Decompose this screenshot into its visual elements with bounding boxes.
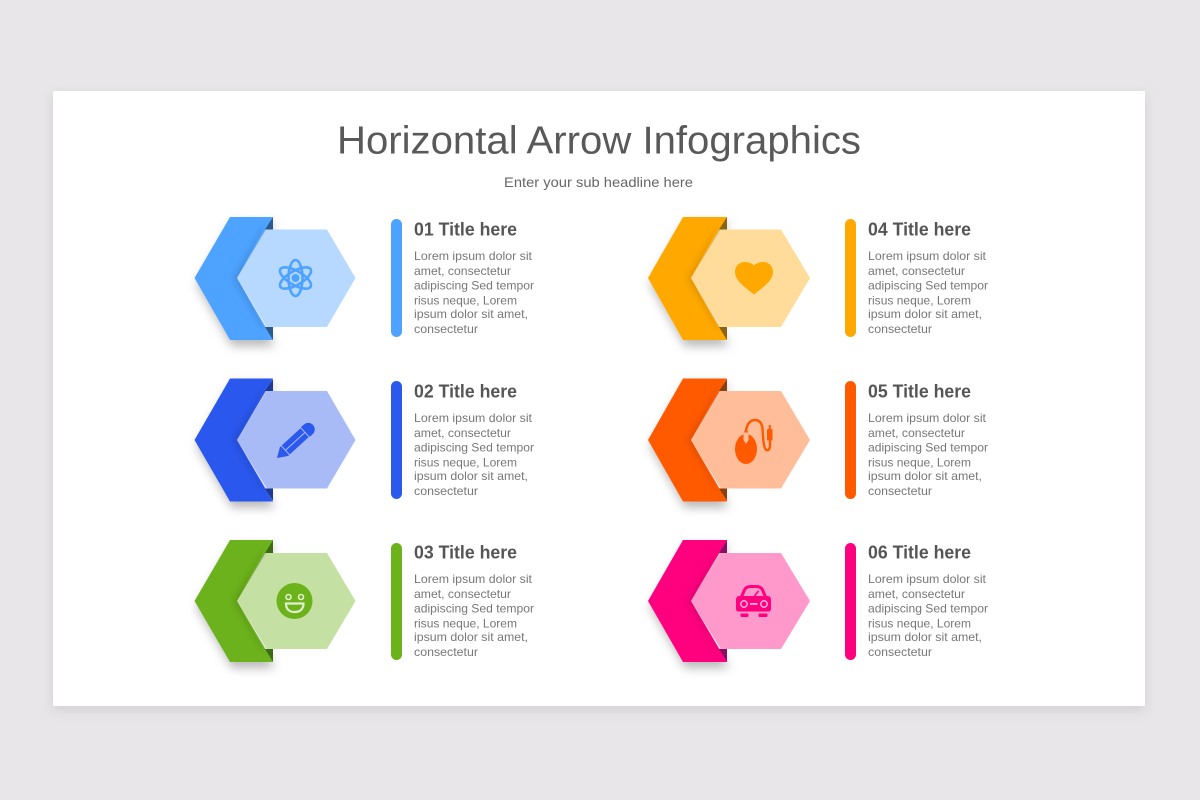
body text 05: consectetur — [868, 484, 932, 498]
item 05 — [648, 378, 988, 502]
heading 01: 01 Title here — [414, 220, 517, 240]
arrow 05 — [646, 378, 731, 513]
item 02 — [194, 378, 534, 502]
hexagon 04 — [691, 230, 810, 327]
body text 02: risus neque, Lorem — [414, 456, 517, 470]
body text 01: risus neque, Lorem — [414, 294, 517, 308]
accent bar 04 — [845, 219, 856, 337]
body text 02: Lorem ipsum dolor sit — [414, 411, 533, 425]
heading 05: 05 Title here — [868, 382, 971, 402]
accent bar 02 — [391, 381, 402, 499]
item 03 — [194, 540, 534, 662]
heading 02: 02 Title here — [414, 382, 517, 402]
body text 04: ipsum dolor sit amet, — [868, 307, 982, 321]
body text 03 — [414, 572, 534, 659]
body text 05: ipsum dolor sit amet, — [868, 469, 982, 483]
body text 06: adipiscing Sed tempor — [868, 602, 988, 616]
body text 04: risus neque, Lorem — [868, 294, 971, 308]
arrow 02 — [192, 378, 277, 513]
icon: pencil — [273, 420, 317, 463]
body text 06: amet, consectetur — [868, 587, 965, 601]
accent bar 01 — [391, 219, 402, 337]
body text 04: consectetur — [868, 322, 932, 336]
heading 03: 03 Title here — [414, 542, 517, 562]
body text 03: adipiscing Sed tempor — [414, 602, 534, 616]
body text 01 — [414, 249, 534, 336]
body text 06: risus neque, Lorem — [868, 616, 971, 630]
body text 05 — [868, 411, 988, 498]
icon: atom — [277, 260, 314, 296]
heading 06: 06 Title here — [868, 542, 971, 562]
body text 05: adipiscing Sed tempor — [868, 440, 988, 454]
hexagon 02 — [237, 391, 356, 488]
title: Horizontal Arrow Infographics — [337, 120, 861, 162]
accent bar 06 — [845, 543, 856, 660]
body text 05: amet, consectetur — [868, 426, 965, 440]
body text 06: consectetur — [868, 645, 932, 659]
body text 04: adipiscing Sed tempor — [868, 278, 988, 292]
item 06 — [648, 540, 988, 662]
item 04 — [648, 217, 988, 340]
body text 05: Lorem ipsum dolor sit — [868, 411, 987, 425]
subtitle: Enter your sub headline here — [504, 174, 693, 190]
arrow 03 — [192, 540, 277, 674]
body text 03: risus neque, Lorem — [414, 616, 517, 630]
body text 06: Lorem ipsum dolor sit — [868, 572, 987, 586]
icon: smiley — [276, 583, 312, 619]
arrow 01 — [192, 217, 277, 352]
body text 06: ipsum dolor sit amet, — [868, 630, 982, 644]
body text 03: amet, consectetur — [414, 587, 511, 601]
body text 03: ipsum dolor sit amet, — [414, 630, 528, 644]
body text 01: Lorem ipsum dolor sit — [414, 249, 533, 263]
body text 01: consectetur — [414, 322, 478, 336]
body text 03: Lorem ipsum dolor sit — [414, 572, 533, 586]
body text 05: risus neque, Lorem — [868, 456, 971, 470]
background panel — [53, 91, 1145, 706]
body text 01: ipsum dolor sit amet, — [414, 307, 528, 321]
body text 01: adipiscing Sed tempor — [414, 278, 534, 292]
hexagon 03 — [237, 553, 356, 649]
heading 04: 04 Title here — [868, 220, 971, 240]
hexagon 01 — [237, 230, 356, 327]
body text 01: amet, consectetur — [414, 264, 511, 278]
hexagon 05 — [691, 391, 810, 488]
body text 06 — [868, 572, 988, 659]
arrow 04 — [646, 217, 731, 352]
body text 02: adipiscing Sed tempor — [414, 440, 534, 454]
accent bar 03 — [391, 543, 402, 660]
body text 02: ipsum dolor sit amet, — [414, 469, 528, 483]
icon: car — [736, 586, 771, 617]
body text 04: amet, consectetur — [868, 264, 965, 278]
body text 04 — [868, 249, 988, 336]
icon: mouse — [735, 420, 772, 464]
body text 02: amet, consectetur — [414, 426, 511, 440]
icon: heart — [735, 262, 773, 294]
body text 02: consectetur — [414, 484, 478, 498]
body text 02 — [414, 411, 534, 498]
arrow 06 — [646, 540, 731, 674]
item 01 — [194, 217, 534, 340]
body text 03: consectetur — [414, 645, 478, 659]
accent bar 05 — [845, 381, 856, 499]
body text 04: Lorem ipsum dolor sit — [868, 249, 987, 263]
hexagon 06 — [691, 553, 810, 649]
